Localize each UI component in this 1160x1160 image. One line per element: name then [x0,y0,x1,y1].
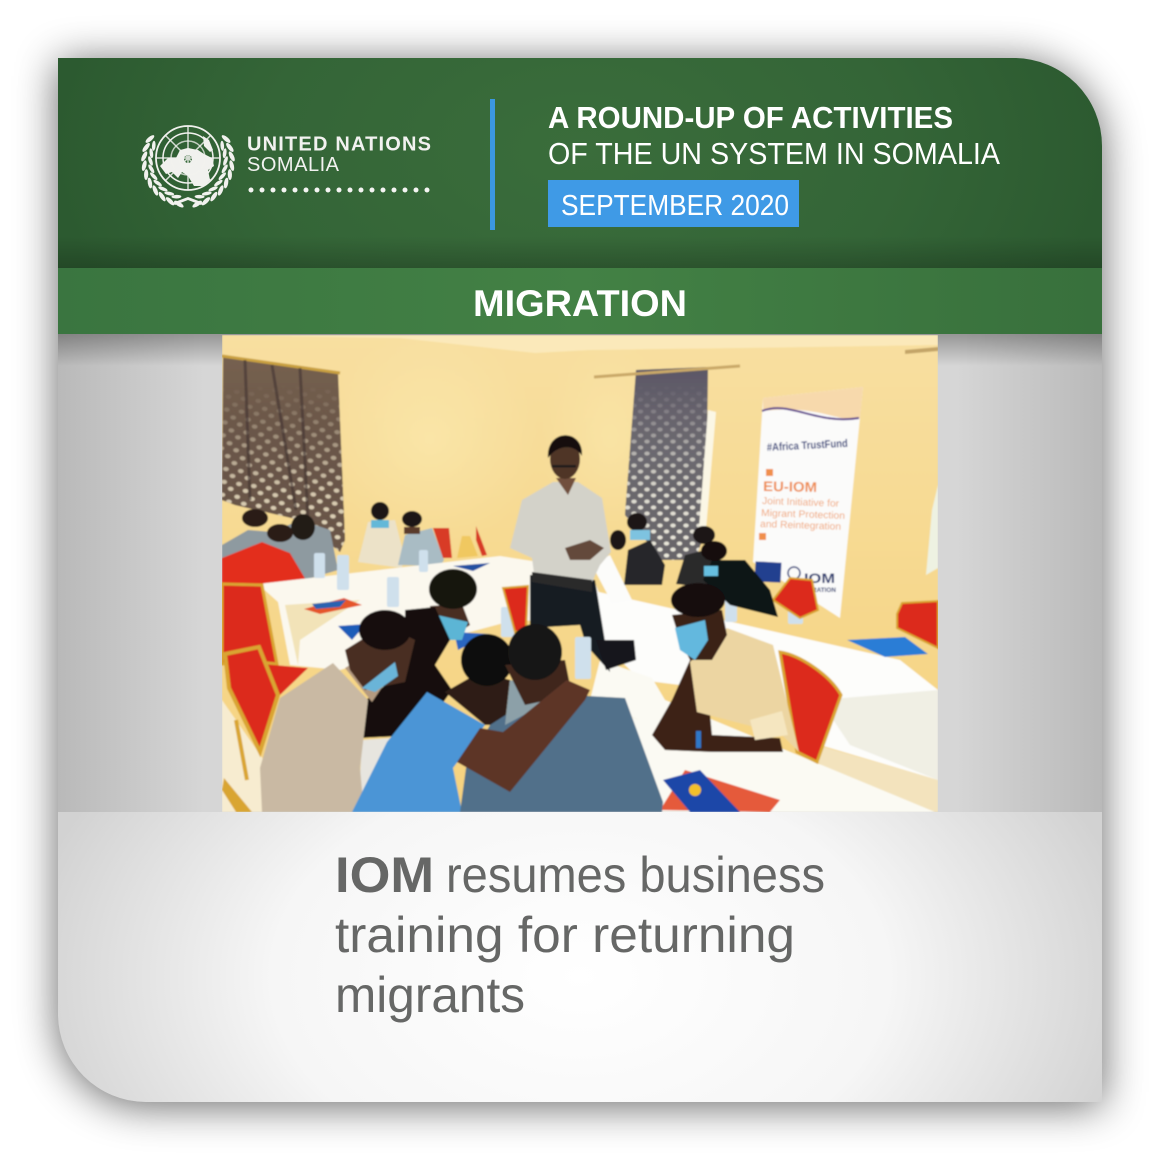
heading [335,847,825,1023]
curtain right [594,366,740,560]
section band: migration [58,268,1102,334]
banner: EU-IOM: Migrant Protection [761,508,845,522]
panel: header [58,58,1102,268]
foreground man in cream [652,583,799,752]
heading: resumes business [446,847,825,903]
folders and papers [304,563,928,812]
red chairs right [773,578,938,762]
icon: UN emblem [140,126,236,209]
title line 2: OF THE UN SYSTEM IN SOMALIA [548,136,1000,171]
heading: IOM [335,847,434,903]
foreground man in denim [457,624,663,812]
banner: EU-IOM: and Reintegration [760,519,841,533]
heading: training for returning [335,907,795,963]
SOMALIA wordmark: SOMALIA [247,154,340,176]
back row participants right [592,513,778,670]
red chairs left [222,584,528,812]
section band: migration: MIGRATION [473,283,687,324]
foreground man in blue [352,634,513,812]
header divider [490,99,495,230]
date badge: SEPTEMBER 2020 [561,190,789,222]
back chairs [433,526,487,558]
tables [258,556,938,812]
date badge [548,180,799,227]
banner: EU-IOM: EU-IOM [763,478,817,495]
banner: EU-IOM: IOM [804,570,835,586]
banner: EU-IOM: Joint Initiative for [762,496,840,510]
heading: migrants [335,967,525,1023]
back row participants left [222,502,444,586]
banner: EU-IOM [753,387,863,618]
photo: training session [222,330,938,812]
water bottles [314,550,803,679]
UNITED NATIONS wordmark: UNITED NATIONS [247,134,431,156]
banner: EU-IOM: RATION [812,588,836,594]
title line 1: A ROUND-UP OF ACTIVITIES [548,100,953,135]
panel: photo backdrop [58,334,1102,812]
UN Somalia logo [140,126,431,209]
banner: EU-IOM: #Africa TrustFund [767,438,848,454]
standing facilitator trousers [530,575,610,672]
standing facilitator [510,435,611,592]
panel: lower caption [58,812,1102,1102]
foreground man in beige [260,610,415,812]
room walls and floor [222,330,938,812]
paper on knee [358,738,392,812]
curtain left [222,356,345,552]
seated man with black shirt [353,569,477,738]
dotted rule [248,188,430,192]
